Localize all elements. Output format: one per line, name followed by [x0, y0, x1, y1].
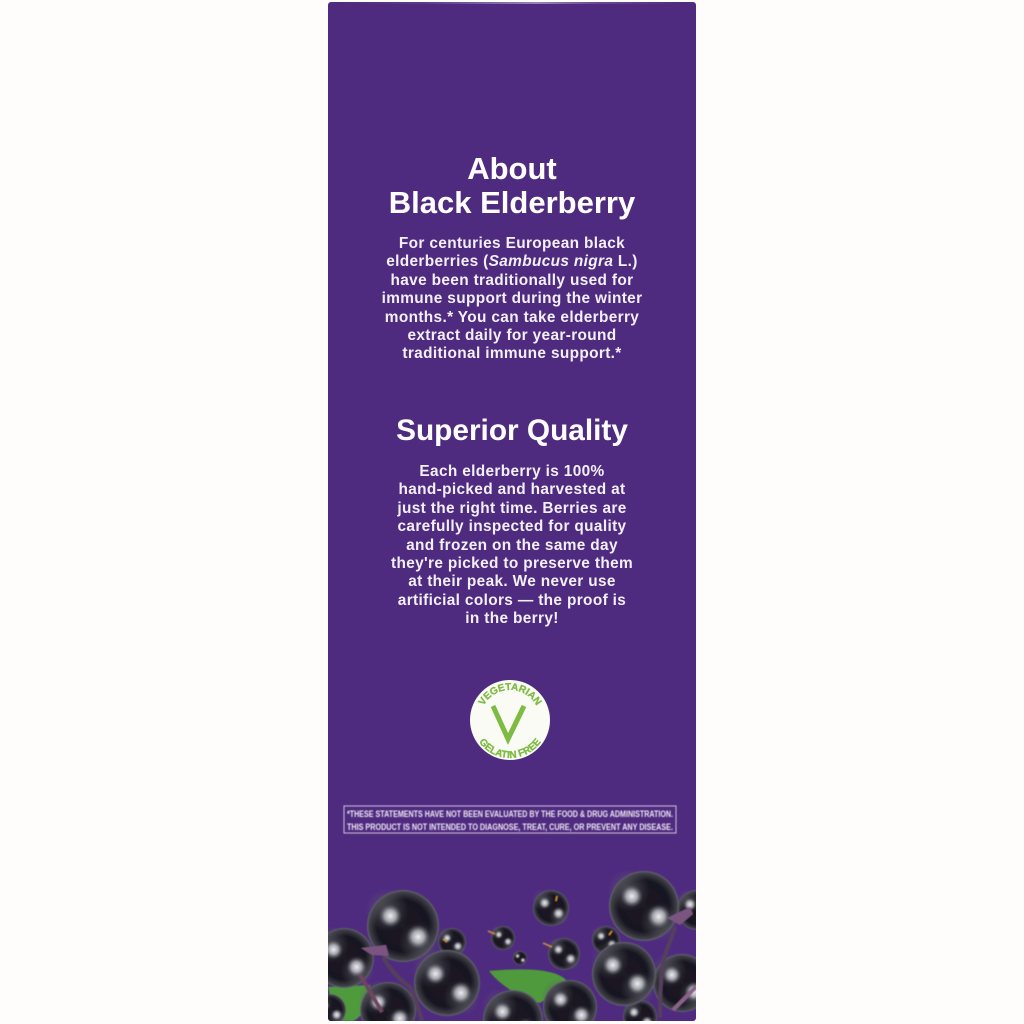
- text block: superior quality: in the berry!: [465, 610, 559, 627]
- leaf: centre: [489, 969, 566, 1003]
- illustration: elderberries and leaves: [328, 870, 696, 1021]
- text block: about elderberry: immune support during the winter: [382, 290, 642, 307]
- text block: superior quality: and frozen on the same day: [406, 537, 618, 554]
- disclaimer box: [342, 804, 678, 834]
- text block: about elderberry: extract daily for year-round: [407, 327, 617, 344]
- heading: About Black Elderberry: Black Elderberry: [389, 185, 635, 220]
- text block: superior quality: hand-picked and harvested at: [398, 481, 626, 498]
- panel top highlight: [340, 2, 680, 4]
- stems: left: [383, 957, 422, 1021]
- text block: superior quality: at their peak. We never use: [408, 573, 616, 590]
- stem caps: [361, 907, 693, 956]
- text block: about elderberry: have been traditionally used for: [391, 272, 633, 289]
- text block: superior quality: carefully inspected for quality: [398, 518, 626, 535]
- panel: purple box: [328, 2, 696, 1021]
- stem: right pink: [673, 987, 696, 1010]
- text block: superior quality: just the right time. Berries are: [397, 500, 627, 517]
- stem: left pink: [360, 975, 382, 1012]
- heading: About Black Elderberry: [389, 151, 636, 220]
- berry stalks: orange: [443, 896, 612, 947]
- heading: Superior Quality: Superior Quality: [396, 414, 628, 447]
- text block: superior quality: [391, 463, 633, 627]
- berries: back: [328, 890, 696, 1021]
- text block: superior quality: Each elderberry is 100%: [419, 463, 605, 480]
- berries: front: [312, 869, 679, 1024]
- heading: About Black Elderberry: About: [467, 151, 557, 186]
- stems: right: [660, 927, 675, 1018]
- icon: vegetarian gelatin free badge: GELATIN FREE: [480, 738, 542, 758]
- text block: about elderberry: months.* You can take elderberry: [385, 309, 639, 326]
- text block: about elderberry: For centuries European black: [399, 235, 625, 252]
- leaf: left: [328, 985, 370, 1021]
- text block: superior quality: artificial colors — the proof is: [398, 592, 626, 609]
- text block: about elderberry: [382, 235, 642, 362]
- icon: vegetarian gelatin free badge: [470, 680, 550, 760]
- text block: about elderberry: elderberries (Sambucus nigra L.): [386, 253, 638, 270]
- text block: superior quality: they're picked to preserve them: [391, 555, 633, 572]
- text block: about elderberry: traditional immune support.*: [402, 345, 622, 362]
- icon: vegetarian gelatin free badge: VEGETARIAN: [478, 682, 542, 706]
